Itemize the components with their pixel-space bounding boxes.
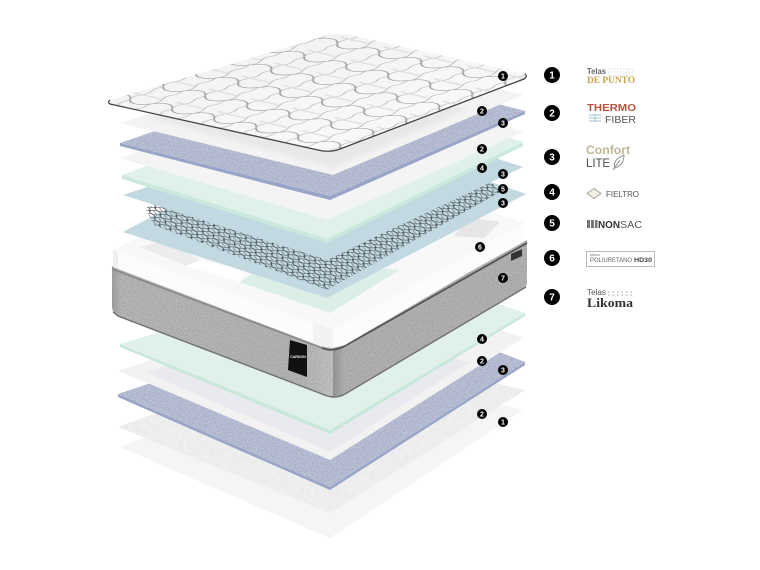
legend 2: Thermo Fiber: FIBER (605, 115, 636, 126)
legend 6: Poliuretano HD30 (544, 250, 654, 266)
legend 3: Confort Lite: 3 (549, 152, 555, 164)
pocket springs (145, 140, 500, 290)
layer number badges: 2 (480, 358, 484, 366)
layer: light blue sheet under springs (123, 128, 526, 298)
legend 7: Telas Likoma: Telas (587, 288, 606, 297)
legend 7: Telas Likoma: Likoma (587, 295, 634, 310)
legend 4: Fieltro (544, 184, 639, 200)
left side fabric (112, 266, 333, 398)
layer number badges: 5 (501, 186, 505, 194)
legend 5: Nonsac: SAC (620, 219, 642, 231)
legend 2: Thermo Fiber: 2 (549, 108, 555, 120)
layer number badges: 3 (501, 120, 505, 128)
legend 2: Thermo Fiber: THERMO (587, 103, 636, 114)
legend 5: Nonsac (544, 215, 642, 231)
legend 7: Telas Likoma (544, 288, 634, 310)
side label (288, 340, 307, 377)
white foam frame (113, 150, 524, 348)
legend 7: Telas Likoma: 7 (549, 292, 555, 304)
foam insert bright (186, 260, 245, 282)
legend 6: Poliuretano HD30: Marca (590, 253, 600, 257)
legend 6: Poliuretano HD30: HD30 (634, 258, 653, 264)
layer number badges: 2 (480, 412, 484, 418)
legend 1: Telas de punto: Telas (587, 67, 607, 76)
layer number badges: 3 (501, 368, 505, 374)
legend 3: Confort Lite: Confort (586, 145, 630, 157)
layer number badges: 6 (478, 244, 482, 252)
legend 4: Fieltro: FIELTRO (606, 189, 639, 199)
legend 5: Nonsac: NON (598, 219, 620, 231)
right top piping (322, 243, 527, 350)
legend 5: Nonsac: 5 (549, 218, 555, 230)
foam insert grey left (140, 240, 200, 266)
legend 1: Telas de punto (544, 67, 635, 86)
layer: bottom fieltro green (120, 290, 525, 434)
legend 1: Telas de punto: DE PUNTO (587, 76, 635, 86)
foam insert green (240, 262, 400, 313)
small corner label (511, 249, 522, 261)
layer: bottom thermo fiber white (119, 295, 523, 460)
layer: quilted top (108, 34, 526, 151)
legend 3: Confort Lite (544, 145, 630, 170)
layer: fieltro green (122, 110, 523, 243)
layer: bottom thermo fiber (118, 347, 525, 513)
layer number badges (475, 71, 508, 427)
legend 2: Thermo Fiber (544, 103, 636, 126)
layer number badges: 2 (480, 146, 484, 154)
foam insert grey right (453, 218, 500, 238)
layer: bottom confort lite blue (118, 320, 525, 490)
bottom piping (113, 287, 526, 397)
layer: confort lite blue (120, 68, 525, 200)
left top piping (112, 269, 322, 348)
legend 4: Fieltro: 4 (549, 188, 555, 198)
layer: thermo fiber white top (120, 60, 523, 175)
mattress core with grey fabric (112, 240, 527, 398)
layer number badges: 3 (501, 200, 505, 208)
legend 6: Poliuretano HD30: 6 (549, 254, 555, 264)
layer: thermo fiber white (120, 95, 523, 220)
layer number badges: 4 (480, 166, 484, 172)
layer number badges: 7 (501, 276, 505, 282)
layer number badges: 1 (501, 74, 505, 80)
legend 6: Poliuretano HD30: POLIURETANO (590, 258, 632, 264)
layer: light blue sheet above springs (123, 130, 523, 260)
legend 1: Telas de punto: 1 (549, 70, 555, 82)
legend 3: Confort Lite: LITE (586, 158, 610, 170)
layer number badges: 2 (480, 108, 484, 116)
quilted top binding (108, 74, 526, 151)
layer number badges: 3 (501, 172, 505, 178)
side label: CARDON (290, 355, 306, 359)
layer: bottom white fabric (120, 367, 523, 538)
right side fabric (328, 240, 527, 398)
layer number badges: 4 (480, 336, 484, 344)
layer number badges: 1 (501, 420, 505, 426)
